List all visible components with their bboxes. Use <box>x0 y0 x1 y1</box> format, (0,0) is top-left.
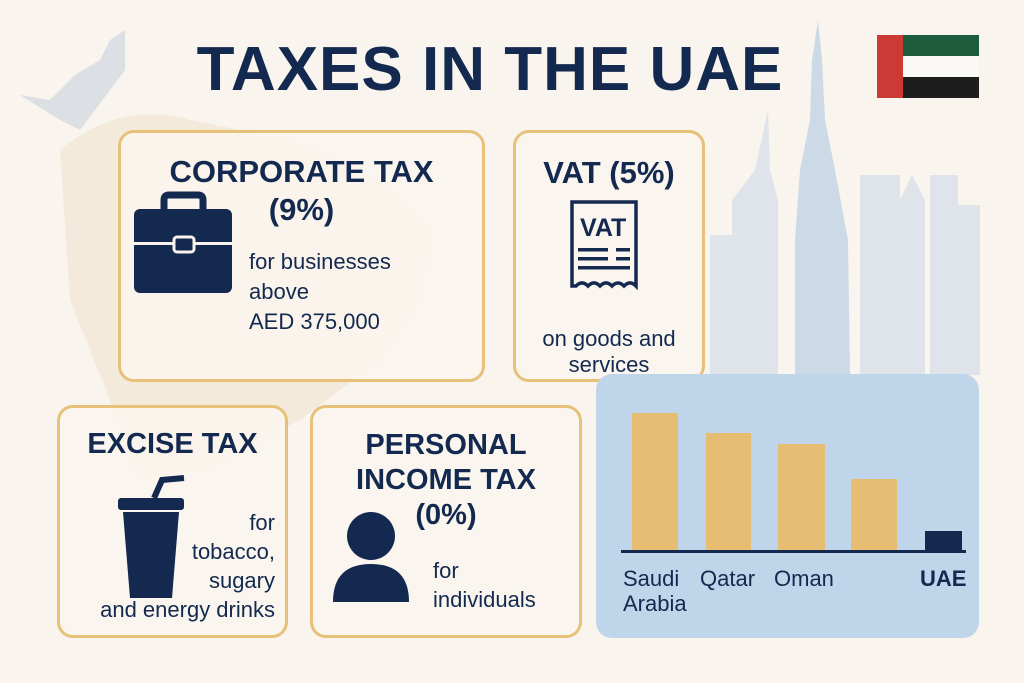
icon: UAE flag <box>877 35 979 98</box>
heading: VAT: VAT (5%) <box>543 155 675 190</box>
text: personal description: for <box>433 558 459 583</box>
skyline <box>710 20 980 375</box>
panel: VAT <box>513 130 705 382</box>
bars <box>632 413 678 551</box>
labels: Saudi <box>623 566 679 591</box>
text: corporate description: for businesses <box>249 249 391 274</box>
text: VAT description <box>542 326 676 377</box>
text: corporate description: AED 375,000 <box>249 309 380 334</box>
text: excise description: tobacco, <box>192 539 275 564</box>
text: corporate description <box>249 249 391 334</box>
text: VAT description: on goods and <box>542 326 676 351</box>
text: personal description: individuals <box>433 587 536 612</box>
text: corporate description: above <box>249 279 309 304</box>
labels <box>623 566 687 616</box>
panel: personal income tax <box>310 405 582 638</box>
bar chart: UAE <box>920 566 966 591</box>
heading: personal income tax: (0%) <box>415 499 477 531</box>
labels: Arabia <box>623 591 687 616</box>
text: excise description <box>100 510 275 622</box>
text: excise description: and energy drinks <box>100 597 275 622</box>
heading: corporate tax: CORPORATE TAX <box>169 154 434 189</box>
text: excise description: sugary <box>209 568 275 593</box>
text: excise description: for <box>249 510 275 535</box>
icon: briefcase <box>134 192 232 293</box>
bar chart: Qatar <box>700 566 755 591</box>
heading: personal income tax <box>356 429 536 531</box>
icon: person <box>333 512 409 602</box>
icon: drink cup <box>118 475 184 598</box>
heading: corporate tax <box>169 154 434 227</box>
title: TAXES IN THE UAE <box>197 35 783 104</box>
heading: excise: EXCISE TAX <box>87 428 258 460</box>
text: VAT description: services <box>569 352 649 377</box>
bar chart: Oman <box>774 566 834 591</box>
heading: personal income tax: INCOME TAX <box>356 464 536 496</box>
bar chart <box>596 374 979 638</box>
panel: excise tax <box>57 405 288 638</box>
text: personal description <box>433 558 536 612</box>
axis <box>621 550 966 553</box>
heading: personal income tax: PERSONAL <box>365 429 527 461</box>
icon: VAT receipt: VAT <box>580 214 626 242</box>
heading: corporate tax: (9%) <box>269 192 334 227</box>
panel: corporate tax <box>118 130 485 382</box>
icon: VAT receipt <box>570 200 638 290</box>
